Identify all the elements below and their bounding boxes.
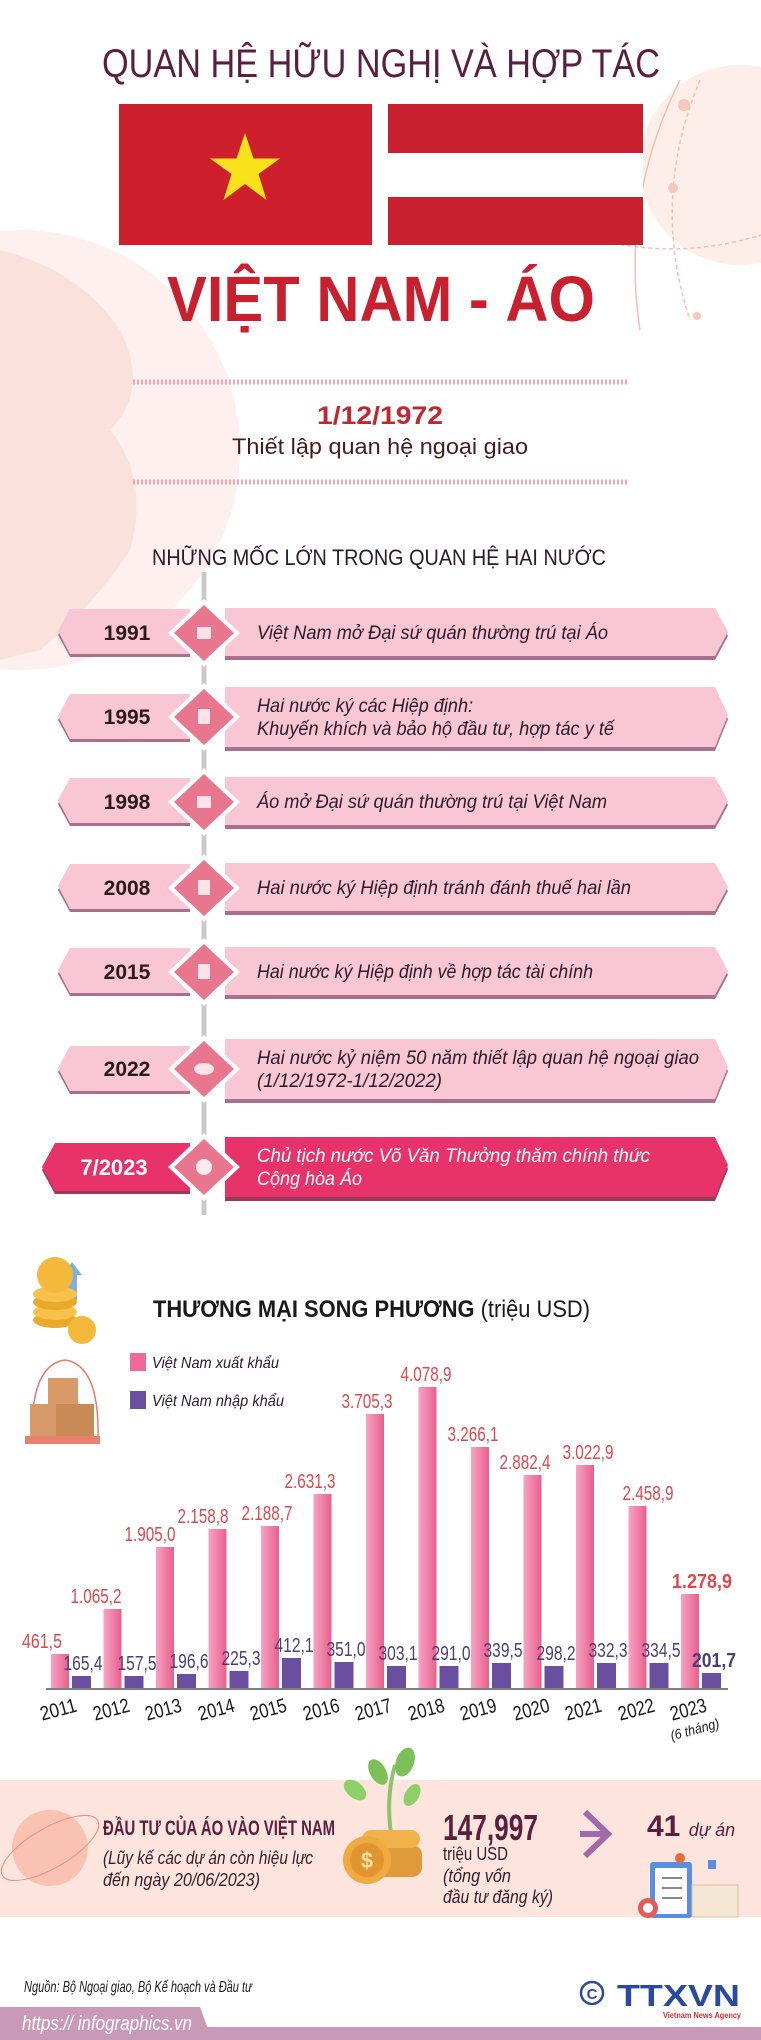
stat: total capital: (tổng vốn [443,1866,511,1886]
bar chart: 298,2 [536,1643,576,1665]
logo: TTXVN [581,1978,742,2020]
timeline row 2008 [58,854,728,922]
bar chart: 157,5 [118,1653,156,1675]
bar chart [22,1364,736,1689]
panel: investment [0,1745,761,1918]
logo: TTXVN: Vietnam News Agency [663,2011,742,2020]
year axis labels: 2014 [196,1695,237,1726]
flag: Austria [388,104,643,245]
stat: projects: 41 dự án [647,1810,735,1843]
year axis labels: 2012 [91,1695,132,1726]
date callout: Thiết lập quan hệ ngoại giao [232,434,528,459]
bar chart: 2.631,3 [284,1471,336,1493]
timeline row 2022: Hai nước kỷ niệm 50 năm thiết lập quan hệ ngoại giao [257,1048,699,1069]
bar chart: 1.278,9 [672,1571,732,1593]
timeline row 1995: 1995 [104,706,151,729]
timeline row 7/2023: Cộng hòa Áo [257,1169,362,1190]
bar chart: 4.078,9 [400,1364,452,1386]
background globe right [600,65,761,330]
bar chart: 351,0 [326,1639,366,1661]
year axis labels: 2018 [406,1695,447,1726]
year axis labels: 2013 [143,1695,184,1726]
bar chart: 339,5 [484,1640,522,1662]
timeline row 1995: Khuyến khích và bảo hộ đầu tư, hợp tác y tế [257,719,615,740]
icon: plant and coins: $ [361,1848,373,1873]
year axis labels: 2016 [301,1695,342,1726]
timeline row 1991 [58,599,728,667]
timeline row 2022: (1/12/1972-1/12/2022) [257,1071,442,1092]
timeline row 2022 [58,1035,728,1103]
bar chart: 461,5 [22,1631,62,1653]
year axis labels: 2015 [248,1695,289,1726]
year axis labels: 2022 [616,1695,657,1726]
icon: clipboard [638,1853,738,1918]
bar chart: 2.188,7 [242,1503,292,1525]
title: QUAN HỆ HỮU NGHỊ VÀ HỢP TÁC [102,41,660,86]
bar chart: 2.882,4 [500,1452,550,1474]
investment title: (Lũy kế các dự án còn hiệu lực [103,1848,313,1868]
bar chart: 225,3 [222,1648,260,1670]
bar chart: 1.905,0 [124,1524,176,1546]
year axis labels: 2020 [511,1695,552,1726]
bar chart: 165,4 [64,1653,102,1675]
legend: Việt Nam nhập khẩu [152,1392,284,1410]
heading: milestones: NHỮNG MỐC LỚN TRONG QUAN HỆ HAI NƯỚC [152,544,606,570]
bar chart: 3.266,1 [448,1424,498,1446]
chart title: THƯƠNG MẠI SONG PHƯƠNG (triệu USD) [153,1296,590,1323]
timeline row 2015: Hai nước ký Hiệp định về hợp tác tài chính [257,962,593,983]
background globe left [0,230,240,670]
investment title: ĐẦU TƯ CỦA ÁO VÀO VIỆT NAM [103,1816,335,1840]
timeline row 2015: 2015 [104,961,151,984]
year axis labels [38,1695,721,1743]
icon: coins and boxes [25,1257,100,1444]
bar chart: 1.065,2 [70,1586,122,1608]
stat: total capital [443,1807,553,1907]
timeline row 1991: Việt Nam mở Đại sứ quán thường trú tại Áo [257,623,608,644]
flag: Vietnam [119,104,372,245]
footer bar [0,2007,761,2040]
bar chart: 2.458,9 [622,1483,674,1505]
timeline row 1991: 1991 [104,622,151,645]
year axis labels: 2023 [668,1695,709,1726]
stat: total capital: 147,997 [443,1807,538,1848]
bar chart: 303,1 [378,1643,418,1665]
year axis labels: 2017 [353,1695,394,1726]
year axis labels: 2021 [563,1695,604,1726]
timeline row 2008: Hai nước ký Hiệp định tránh đánh thuế hai lần [257,878,631,899]
timeline row 1998: 1998 [104,791,151,814]
year axis labels: 2011 [38,1695,79,1726]
timeline row 1995 [58,683,728,751]
logo: TTXVN: C [587,1986,598,2003]
timeline row 7/2023: 7/2023 [80,1155,148,1180]
stat: total capital: triệu USD [443,1844,508,1864]
bar chart: 3.022,9 [562,1442,614,1464]
timeline row 1995: Hai nước ký các Hiệp định: [257,696,473,717]
timeline row 7/2023: Chủ tịch nước Võ Văn Thưởng thăm chính thức [257,1146,650,1167]
bar chart: 291,0 [432,1643,470,1665]
legend: Việt Nam xuất khẩu [152,1354,279,1372]
arrow [580,1812,608,1856]
bar chart: 201,7 [692,1650,736,1672]
timeline row 2008: 2008 [104,877,151,900]
timeline row 2022: 2022 [104,1058,150,1081]
investment title: đến ngày 20/06/2023) [103,1870,260,1890]
bar chart: 334,5 [642,1640,680,1662]
heading: Việt Nam - Áo: VIỆT NAM - ÁO [167,262,595,335]
timeline row 1998: Áo mở Đại sứ quán thường trú tại Việt Nam [256,792,607,813]
bar chart: 332,3 [588,1640,628,1662]
year axis labels: 2019 [458,1695,499,1726]
timeline row 1998 [58,768,728,836]
bar chart: 3.705,3 [342,1391,392,1413]
bar chart: 196,6 [170,1651,208,1673]
year axis labels: (6 tháng) [668,1715,721,1743]
investment title [103,1816,335,1890]
icon: plant and coins [340,1745,424,1884]
bar chart: 2.158,8 [178,1506,228,1528]
source note: Nguồn: Bộ Ngoại giao, Bộ Kế hoạch và Đầu tư [24,1979,253,1996]
date callout: 1/12/1972 [317,402,443,430]
bar chart: 412,1 [274,1635,314,1657]
footer bar: https:// infographics.vn [22,2013,192,2035]
timeline row 2015 [58,938,728,1006]
date callout [232,402,528,459]
stat: total capital: đầu tư đăng ký) [443,1887,553,1907]
legend [130,1353,284,1410]
logo: TTXVN: TTXVN [617,1978,740,2013]
timeline row 7/2023 [42,1133,728,1201]
